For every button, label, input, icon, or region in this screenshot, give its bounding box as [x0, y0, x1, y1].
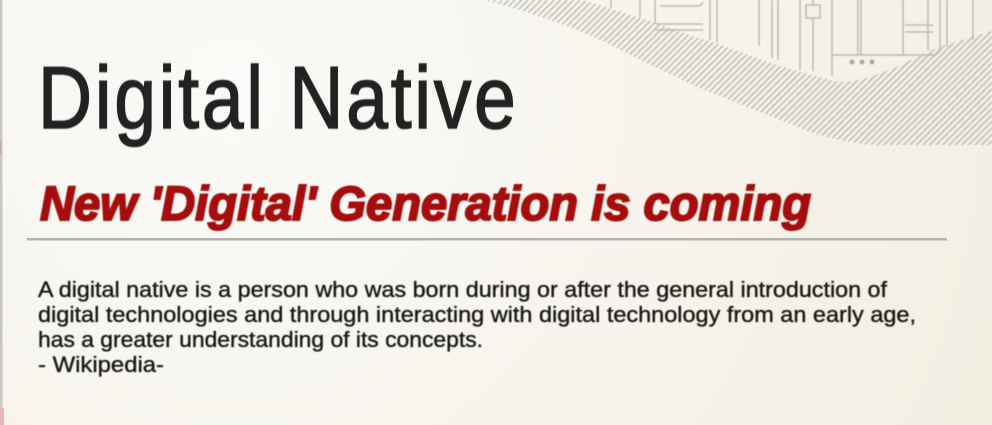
description text: - Wikipedia-: [38, 352, 164, 377]
title: Digital Native: [38, 49, 516, 147]
description text: A digital native is a person who was born during or after the general introduction of: [38, 277, 888, 302]
description text: [38, 277, 916, 377]
divider: [27, 238, 947, 240]
decorative building line art: [611, 0, 973, 76]
subtitle: New 'Digital' Generation is coming: [40, 178, 811, 231]
left edge strip: [0, 0, 4, 425]
description text: has a greater understanding of its concepts.: [38, 327, 483, 352]
description text: digital technologies and through interacting with digital technology from an early age,: [38, 302, 916, 327]
hatched diagonal band: [484, 0, 992, 145]
